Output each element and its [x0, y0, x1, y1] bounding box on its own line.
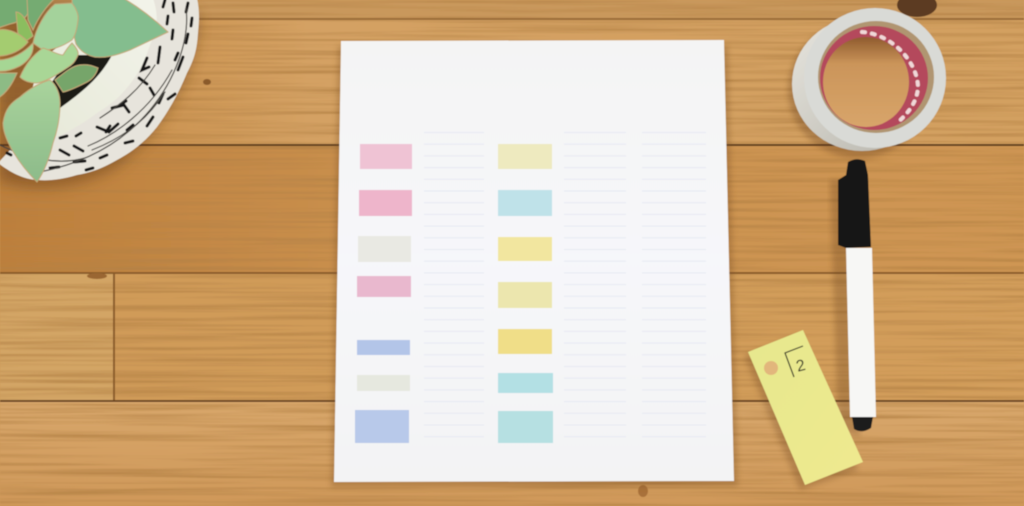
leaf: rosette center [16, 12, 33, 42]
leaf: upper center [33, 3, 78, 50]
punched hole [764, 361, 778, 375]
handwritten mark [785, 346, 807, 377]
leaf: left lower [0, 73, 17, 98]
white inner rim [20, 0, 157, 137]
swatch: aqua 2 [498, 373, 553, 393]
leaf: big front [3, 80, 60, 182]
cardboard core [818, 21, 934, 133]
yellow sticky tag [744, 330, 863, 490]
paper sheet with colour swatches [331, 40, 738, 487]
leaves [0, 0, 168, 182]
roll of masking tape [788, 8, 946, 158]
swatch: pink 1 [360, 144, 412, 169]
ruled lines: column 2 [424, 132, 484, 438]
swatch: pink 2 [359, 190, 412, 216]
ruled lines: column 5 [642, 132, 706, 438]
swatch: yellow 2 [498, 329, 552, 354]
swatch: pale yellow 1 [498, 144, 552, 169]
swatch: aqua 1 [498, 190, 552, 216]
swatch: grey 1 [358, 236, 411, 262]
pot pattern [0, 0, 192, 172]
patterned inside [820, 26, 928, 130]
ruled lines: column 4 [564, 132, 626, 438]
black marker pen [830, 159, 876, 436]
tape side [792, 17, 932, 151]
marker barrel [846, 248, 876, 417]
tape face [804, 8, 946, 148]
leaf: top left [0, 0, 30, 28]
swatch: blue 2 [355, 410, 409, 443]
leaf: lower small [55, 65, 98, 92]
marker cap [838, 159, 871, 248]
swatch: pink 3 [357, 276, 411, 297]
potted succulent [0, 0, 199, 187]
swatch: blue 1 [357, 340, 410, 355]
pot [0, 0, 199, 180]
handwritten mark: 2 [794, 357, 807, 376]
dark soil [50, 55, 112, 108]
swatch: yellow 1 [498, 237, 552, 261]
leaf: right [72, 0, 168, 57]
leaf: center lower [20, 43, 78, 83]
swatch: pale yellow 2 [498, 282, 552, 308]
swatch: grey 2 [357, 375, 410, 391]
swatch: aqua 3 [498, 411, 553, 443]
marker tip [852, 417, 873, 431]
see-through hole [823, 37, 909, 127]
